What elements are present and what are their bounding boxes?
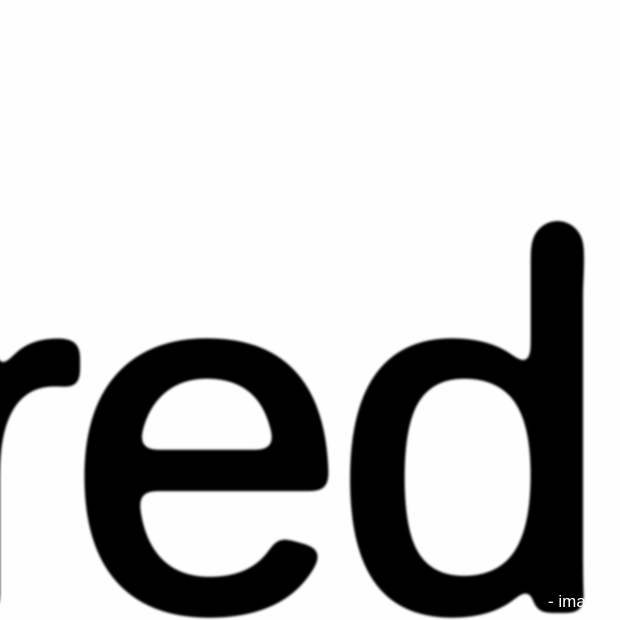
watermark text: - ima: [548, 592, 586, 611]
